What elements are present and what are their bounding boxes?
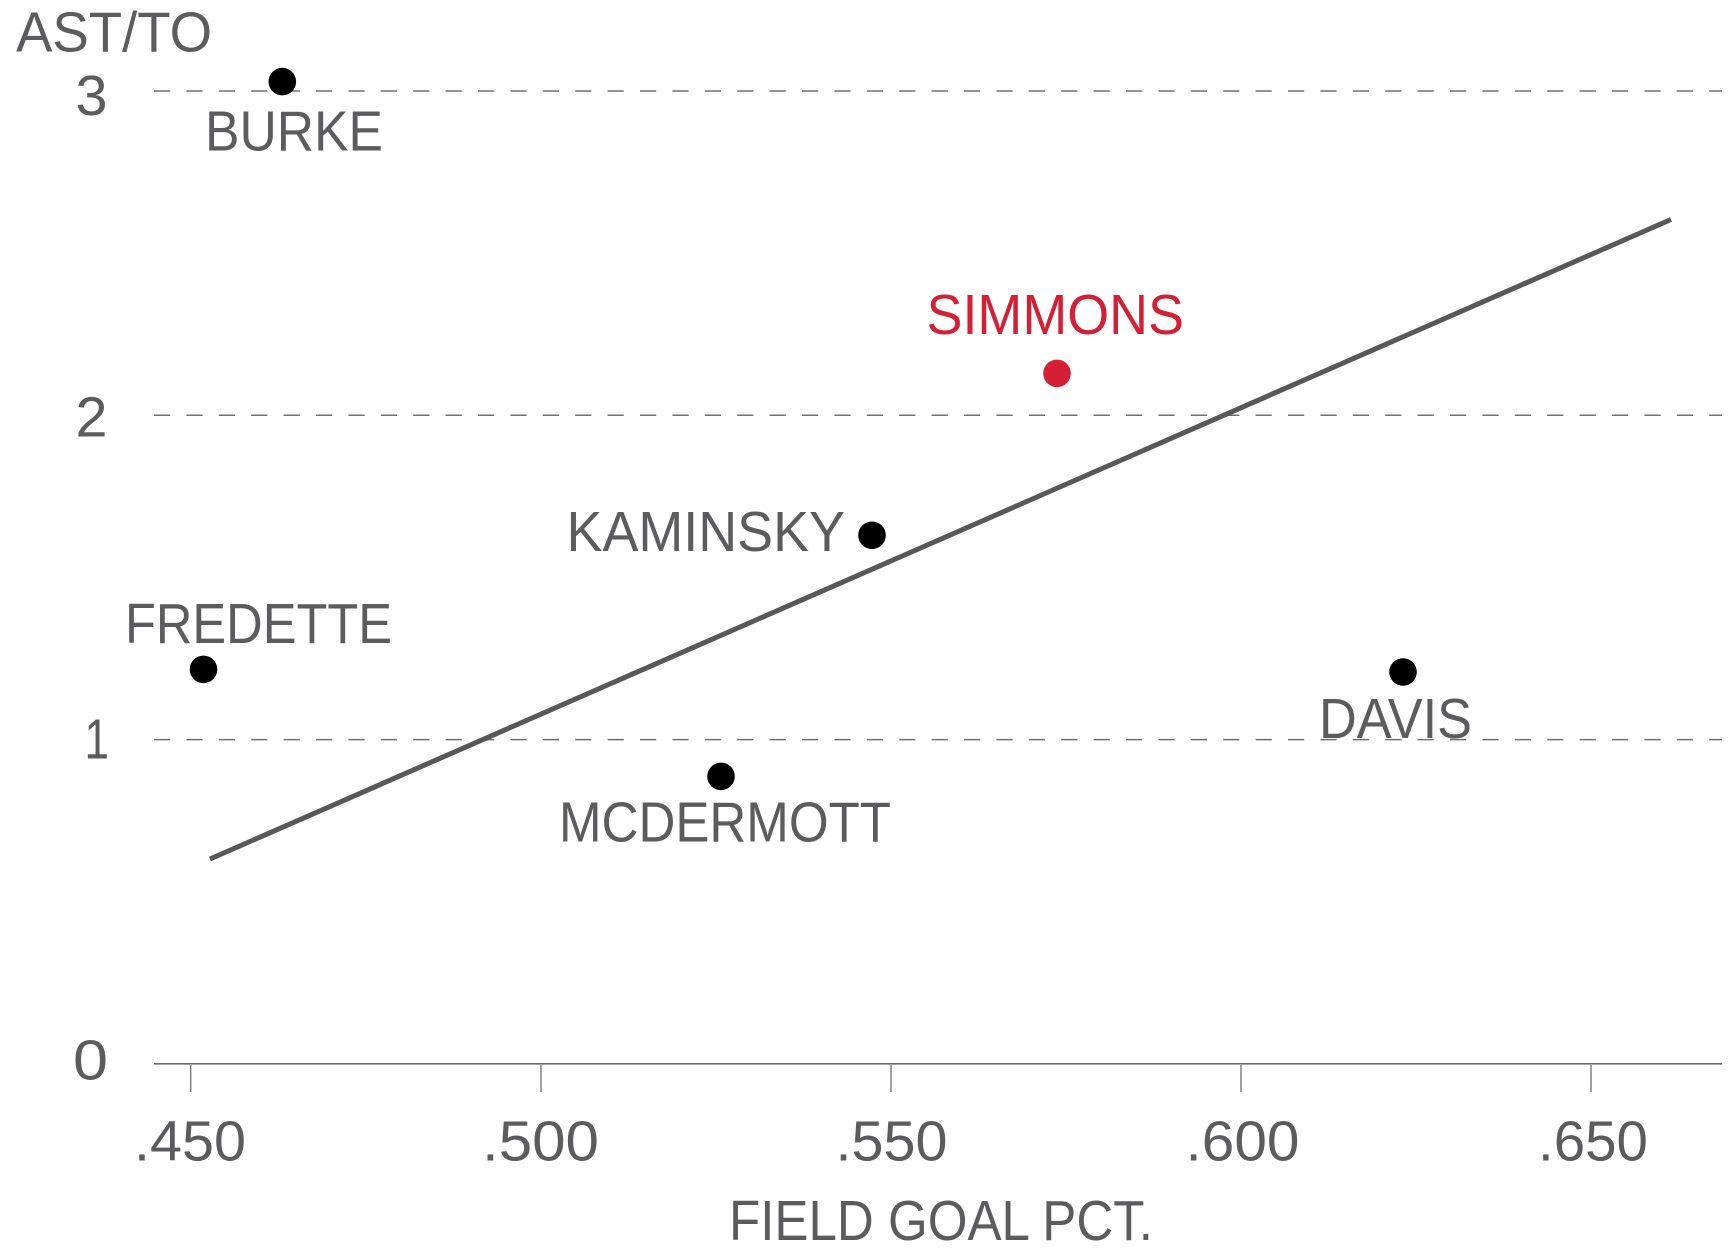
data point: Burke: BURKE — [205, 100, 383, 164]
y-axis tick labels: 2 — [76, 386, 108, 450]
data point: Kaminsky: KAMINSKY — [566, 500, 845, 564]
x-axis tick labels: .450 — [134, 1110, 246, 1174]
y-axis tick labels: 1 — [84, 708, 109, 772]
y-axis title: AST/TO — [16, 1, 212, 65]
y-axis tick labels: 0 — [73, 1029, 108, 1093]
horizontal dashed gridlines — [154, 91, 1722, 740]
data point: Davis — [1319, 658, 1472, 751]
x-axis tick labels — [134, 1110, 1648, 1174]
data point: Simmons (highlighted) — [926, 283, 1184, 387]
data point: Fredette: FREDETTE — [125, 592, 392, 656]
x axis line and tick marks — [154, 1064, 1722, 1092]
x-axis tick labels: .600 — [1186, 1110, 1300, 1174]
x-axis tick labels: .550 — [836, 1110, 948, 1174]
y-axis tick labels — [73, 64, 109, 1093]
data point: Fredette — [125, 592, 392, 683]
data point: Davis: DAVIS — [1319, 687, 1472, 751]
x-axis tick labels: .500 — [482, 1110, 599, 1174]
trend line — [210, 220, 1671, 859]
data point: Burke — [205, 68, 383, 164]
data point: McDermott: MCDERMOTT — [559, 791, 891, 855]
data point: McDermott — [559, 763, 891, 855]
data point: Simmons (highlighted): SIMMONS — [926, 283, 1184, 347]
x-axis tick labels: .650 — [1538, 1110, 1648, 1174]
y-axis tick labels: 3 — [76, 64, 108, 128]
